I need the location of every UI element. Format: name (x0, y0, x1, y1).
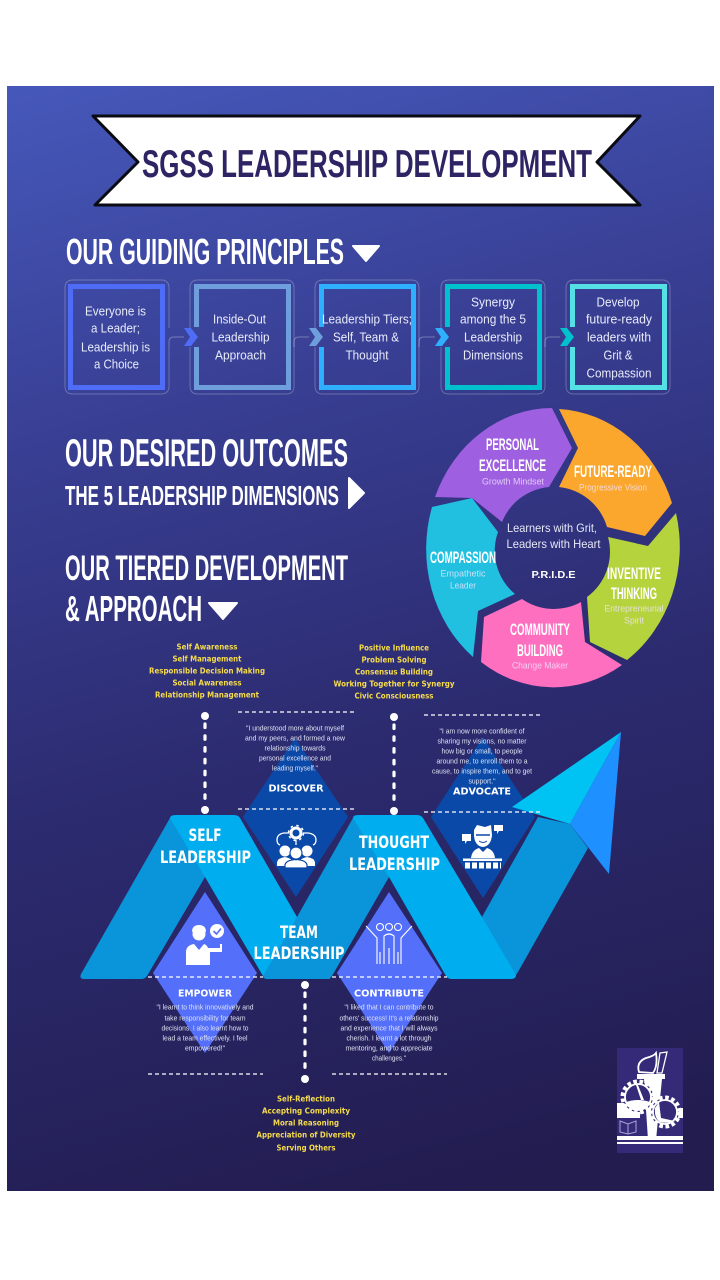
callout: contribute quote: and experience that I will always (340, 1024, 438, 1032)
callout: contribute quote: CONTRIBUTE (354, 988, 424, 1000)
principle 5 (545, 280, 670, 394)
list: team leadership skills (256, 1094, 356, 1152)
principle 4: among the 5 (460, 312, 526, 326)
segment: personal excellence: Growth Mindset (482, 476, 544, 488)
principle 5: Develop (596, 294, 640, 310)
segment: inventive thinking: INVENTIVE (607, 564, 661, 583)
principle 3: Leadership Tiers; (322, 312, 412, 326)
zigzag arrow (80, 732, 621, 979)
heading: desired outcomes: OUR DESIRED OUTCOMES (65, 432, 348, 475)
label: thought leadership (349, 833, 440, 875)
segment: inventive thinking: Spirit (624, 616, 644, 626)
principle 4: Synergy (471, 294, 515, 310)
callout: advocate quote: sharing my visions, no matter (438, 736, 527, 746)
segment: personal excellence: EXCELLENCE (479, 456, 546, 475)
diamond: discover (243, 738, 348, 897)
callout: advocate quote: ADVOCATE (453, 786, 511, 798)
heading: desired outcomes (65, 432, 364, 511)
segment: inventive thinking (587, 513, 680, 660)
wheel centre text: Learners with Grit, (507, 521, 597, 535)
label: thought leadership: LEADERSHIP (349, 855, 440, 875)
heading: tiered development: OUR TIERED DEVELOPMENT (65, 549, 348, 588)
callout: empower quote: empowered!" (185, 1044, 225, 1052)
leadership diagram (80, 642, 621, 1152)
callout: empower quote (156, 988, 254, 1052)
principles flow (65, 280, 670, 394)
segment: personal excellence: PERSONAL (486, 435, 539, 454)
callout: advocate quote: "I am now more confident of (440, 726, 525, 736)
list: thought leadership skills: Working Together for Synergy (334, 680, 455, 688)
principle 4 (419, 280, 545, 394)
segment: future-ready: Progressive Vision (579, 482, 647, 494)
callout: advocate quote: around me, to enroll them to a (436, 756, 528, 766)
principle 2: Leadership (212, 330, 270, 344)
callout: contribute quote: "I liked that I can contribute to (344, 1002, 434, 1012)
wheel centre text: P.R.I.D.E (532, 569, 576, 581)
PRIDE wheel (426, 408, 680, 687)
principle 5: Compassion (586, 366, 652, 380)
callout: advocate quote: how big or small, to people (442, 746, 522, 756)
segment: community building (481, 599, 622, 687)
list: self leadership skills: Responsible Decision Making (149, 666, 265, 676)
icon: school logo (617, 1048, 683, 1153)
principle 5: Grit & (604, 348, 633, 362)
heading: tiered development (65, 549, 348, 629)
callout: contribute quote (340, 988, 438, 1062)
list: thought leadership skills (334, 644, 455, 700)
segment: inventive thinking: THINKING (611, 584, 657, 603)
label: team leadership: TEAM (280, 923, 318, 943)
callout: discover quote: personal excellence and (259, 754, 331, 762)
label: self leadership: SELF (188, 826, 222, 846)
principle 4: Leadership (464, 330, 522, 344)
icon: empower leader with check (186, 924, 224, 965)
label: self leadership (160, 826, 251, 868)
dashed connectors (148, 712, 541, 1083)
list: thought leadership skills: Positive Influence (359, 644, 429, 652)
segment: community building: BUILDING (517, 641, 563, 660)
label: self leadership: LEADERSHIP (160, 848, 251, 868)
callout: discover quote (245, 724, 346, 794)
principle 3: Thought (346, 348, 389, 362)
segment: compassion: Leader (450, 580, 476, 592)
callout: contribute quote: cherish. I learnt a lot through (346, 1034, 432, 1042)
list: thought leadership skills: Problem Solving (362, 656, 427, 664)
segment: personal excellence (435, 408, 572, 522)
heading: guiding principles: OUR GUIDING PRINCIPLES (66, 231, 344, 272)
segment: compassion (426, 498, 515, 657)
callout: contribute quote: others' success! It's a relationship (340, 1014, 438, 1022)
list: thought leadership skills: Consensus Building (355, 668, 433, 676)
wheel centre text (506, 521, 601, 581)
list: team leadership skills: Self-Reflection (277, 1094, 335, 1104)
heading: guiding principles (66, 231, 379, 272)
principle 1: a Choice (94, 356, 139, 372)
principle 1: Leadership is (81, 340, 150, 354)
title banner (93, 116, 640, 205)
heading: tiered development: & APPROACH (65, 588, 202, 629)
principle 1 (65, 280, 169, 394)
callout: contribute quote: mentoring, and to appreciate (346, 1044, 432, 1052)
diamond: contribute (337, 892, 442, 1053)
wheel centre text: Leaders with Heart (506, 537, 601, 551)
callout: discover quote: and my peers, and formed a new (245, 734, 346, 742)
callout: discover quote: relationship towards (264, 744, 326, 752)
principle 4: Dimensions (463, 348, 523, 362)
principle 1: Everyone is (85, 304, 146, 318)
principle 5: leaders with (587, 330, 651, 344)
segment: inventive thinking: Entrepreneurial (604, 604, 664, 614)
list: self leadership skills: Social Awareness (172, 678, 242, 688)
list: thought leadership skills: Civic Consciousness (354, 692, 434, 700)
principle 3: Self, Team & (333, 330, 399, 344)
callout: empower quote: decisions. I also learnt how to (162, 1024, 248, 1032)
callout: empower quote: "I learnt to think innovatively and (156, 1002, 254, 1012)
segment: compassion: Empathetic (440, 568, 486, 580)
callout: discover quote: "I understood more about myself (246, 724, 345, 732)
label: team leadership (254, 923, 344, 964)
segment: compassion: COMPASSION (430, 548, 496, 567)
segment: community building: COMMUNITY (510, 620, 570, 639)
list: self leadership skills: Relationship Management (155, 690, 259, 700)
callout: discover quote: DISCOVER (268, 784, 324, 794)
callout: empower quote: take responsibility for team (164, 1014, 246, 1022)
callout: discover quote: leading myself." (272, 764, 318, 772)
segment: community building: Change Maker (512, 660, 568, 672)
segment: future-ready: FUTURE-READY (574, 462, 652, 481)
icon: advocate speaker at desk (462, 825, 503, 866)
list: team leadership skills: Moral Reasoning (273, 1118, 339, 1128)
list: team leadership skills: Accepting Complexity (262, 1106, 351, 1116)
label: team leadership: LEADERSHIP (254, 944, 344, 964)
callout: advocate quote: support." (468, 776, 496, 786)
list: self leadership skills: Self Management (172, 654, 242, 664)
principle 5: future-ready (586, 312, 652, 326)
principle 3 (294, 280, 419, 394)
callout: empower quote: lead a team effectively. I feel (162, 1034, 248, 1042)
callout: empower quote: EMPOWER (178, 988, 232, 1000)
icon: discover team with gear (277, 826, 316, 868)
list: self leadership skills (149, 642, 265, 700)
diamond: advocate (431, 737, 535, 898)
heading: desired outcomes: THE 5 LEADERSHIP DIMENSIONS (65, 480, 339, 511)
principle 2 (169, 280, 294, 394)
list: team leadership skills: Serving Others (276, 1144, 336, 1152)
segment: future-ready (559, 409, 672, 536)
principle 2: Inside-Out (213, 312, 266, 326)
diamond: empower (153, 892, 257, 1053)
principle 1: a Leader; (91, 320, 140, 336)
callout: advocate quote: cause, to inspire them, and to get (432, 766, 532, 776)
icon: contribute raised hands (366, 924, 412, 964)
callout: advocate quote (432, 726, 532, 798)
label: thought leadership: THOUGHT (359, 833, 429, 853)
callout: contribute quote: challenges." (372, 1054, 406, 1062)
list: team leadership skills: Appreciation of Diversity (256, 1130, 356, 1140)
list: self leadership skills: Self Awareness (176, 642, 238, 652)
principle 2: Approach (215, 348, 266, 362)
